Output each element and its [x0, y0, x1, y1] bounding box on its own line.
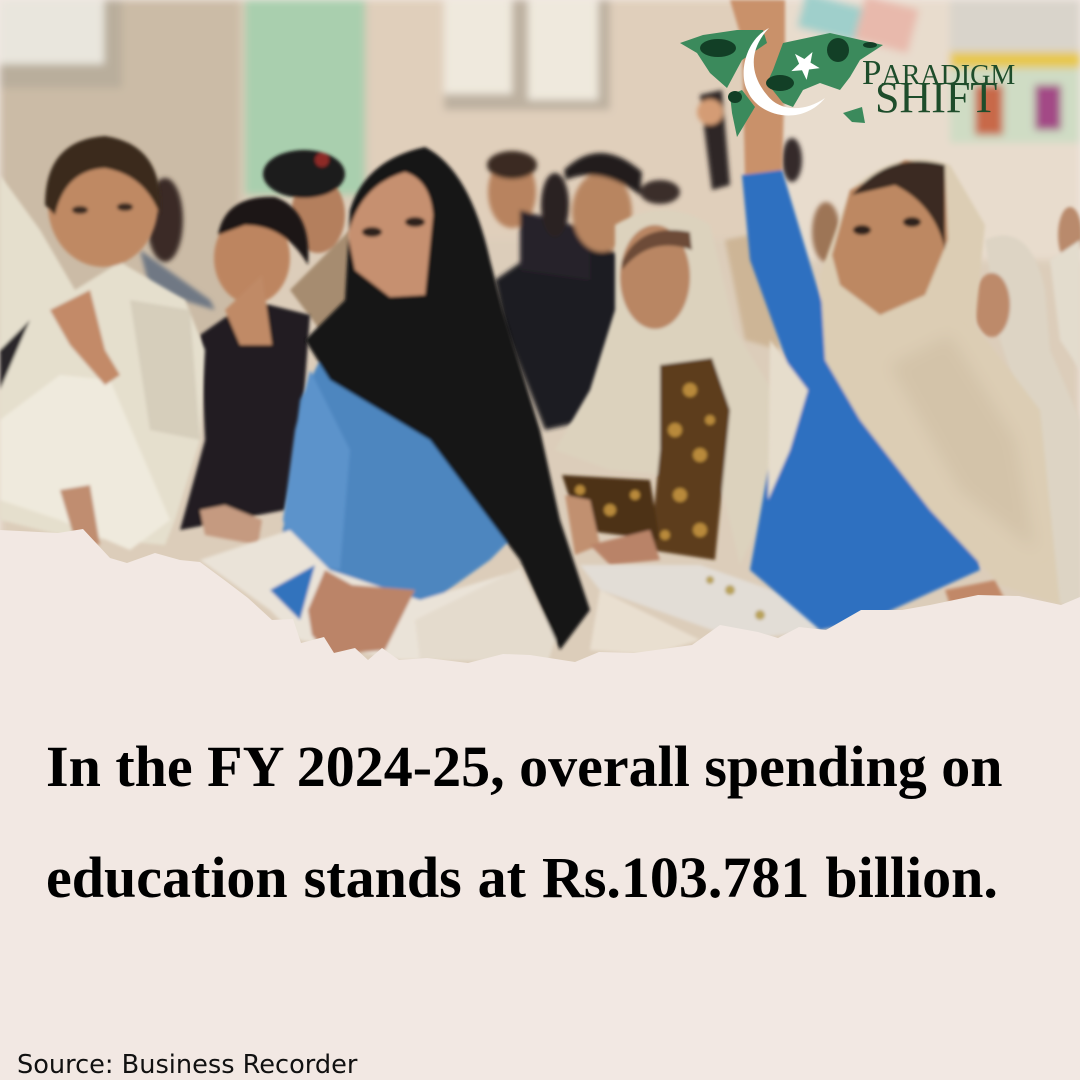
heading line one: In the FY 2024-25, overall spending on	[46, 734, 1003, 799]
child: boy in dark kurta	[180, 197, 310, 545]
icon: white crescent and star	[744, 28, 825, 115]
logo wordmark	[862, 53, 1015, 122]
source note: Source: Business Recorder	[17, 1050, 357, 1080]
logo wordmark: PARADIGM	[862, 53, 1015, 92]
heading line two: education stands at Rs.103.781 billion.	[46, 845, 998, 910]
logo wordmark: SHIFT	[875, 73, 997, 122]
book and white trousers	[580, 565, 820, 655]
logo: Paradigm Shift	[680, 28, 1015, 137]
child: right girl with raised blue-sleeved arm	[730, 0, 1060, 630]
back row of children	[140, 90, 840, 430]
icon: green world map	[680, 30, 883, 137]
child: far right girl in scarf	[974, 207, 1080, 610]
child: center girl in black hijab and blue uniform	[200, 147, 590, 662]
child: boy in white at left	[0, 136, 205, 550]
child: boy with beret	[263, 150, 350, 330]
child: girl with beige scarf and patterned dress	[555, 210, 772, 565]
torn paper edge	[0, 529, 1080, 1080]
classroom wall background	[0, 0, 1080, 680]
